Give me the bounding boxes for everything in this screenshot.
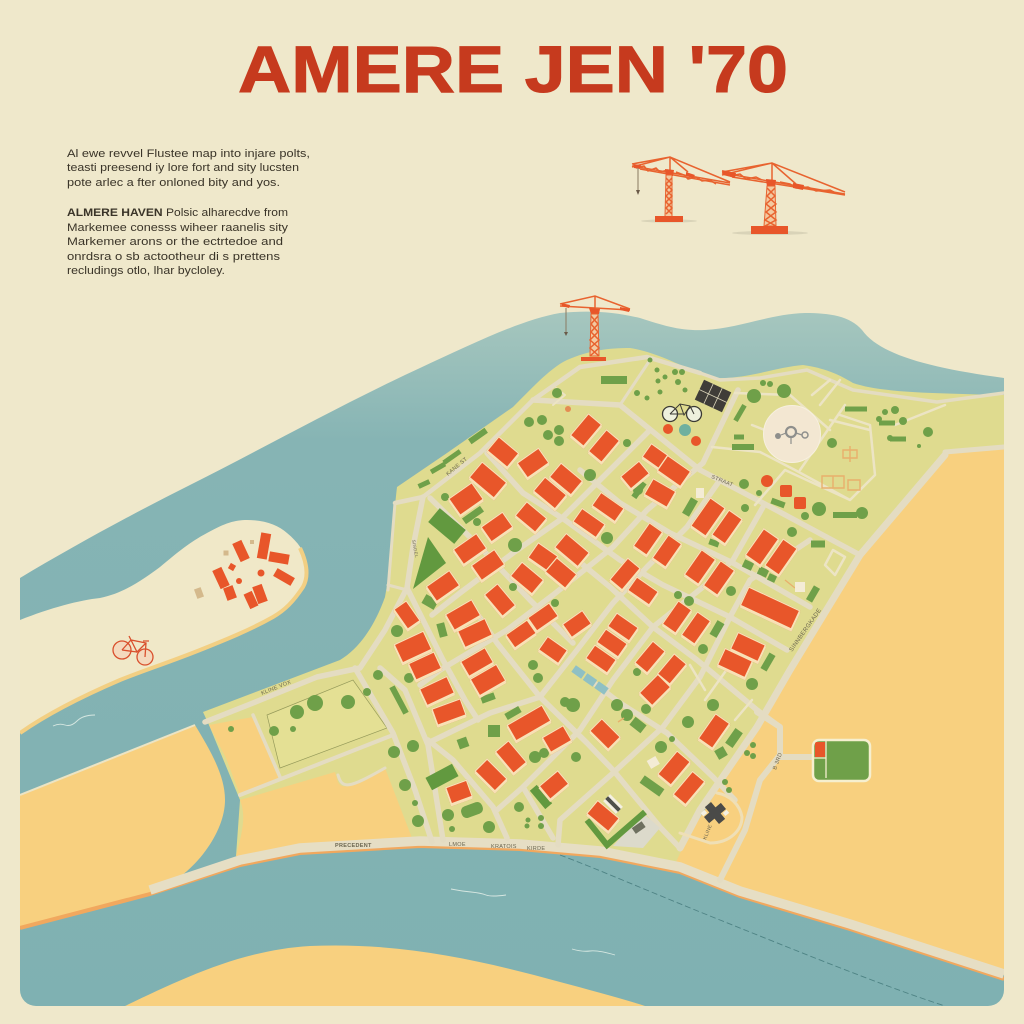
island: [20, 520, 307, 733]
pale park field: [267, 680, 387, 768]
solar panels: [695, 380, 731, 412]
pale edge of west parcel: [20, 725, 195, 795]
street labels: SINNBERGKADE: [789, 608, 823, 653]
dark small building beside hedge: [603, 794, 623, 814]
residential buildings: [394, 414, 800, 832]
pale squares: [647, 488, 805, 769]
terracotta sports plots: [618, 446, 860, 722]
street labels: LMOE: [449, 842, 466, 848]
parking lot: [613, 813, 660, 848]
teal pond near bike hub: [679, 424, 691, 436]
coast road: [150, 841, 1004, 974]
dark cross building: [701, 802, 730, 824]
south-west sand parcels: [20, 717, 412, 928]
street labels: KRATOIS: [491, 844, 517, 850]
green fields and hedges: [389, 376, 906, 819]
Almere Haven text block: onrdsra o sb actootheur di s prettens: [67, 251, 281, 263]
outer east road: [720, 712, 780, 880]
title: AMERE JEN '70: [238, 32, 788, 106]
crane 2: [722, 163, 845, 235]
intro text block: teasti preesend iy lore fort and sity lucsten: [67, 162, 299, 174]
east sand polder: [672, 447, 1004, 975]
plaza circle with sculpture: [764, 406, 820, 462]
parked vehicle: [632, 821, 646, 834]
street labels: KANE ST: [445, 456, 469, 478]
west land and main city ground: [203, 348, 1004, 862]
street labels: KLINE VOX: [261, 679, 292, 697]
green L hedge: [587, 812, 645, 845]
small orange amenities: [565, 406, 806, 509]
Almere Haven text block: Markemee conesss wiheer raanelis sity: [67, 222, 289, 234]
coast shoreline: [20, 846, 1004, 979]
crane 1: [632, 157, 730, 223]
intro text block: pote arlec a fter onloned bity and yos.: [67, 177, 280, 189]
street labels: PRECEDENT: [335, 843, 372, 849]
road network: [205, 357, 1004, 848]
icon: orange bicycle on island: [113, 636, 153, 665]
street labels: B 3RD: [772, 752, 784, 771]
bottom sand bar: [125, 945, 645, 1006]
Almere Haven text block: ALMERE HAVEN Polsic alharecdve from: [67, 207, 288, 219]
crane 3 on the shore: [560, 296, 630, 361]
water ripples and shipping lane: [53, 715, 945, 1006]
street labels: SINGEL: [411, 539, 419, 558]
street labels: KIRDE: [527, 846, 545, 852]
island beach rim: [20, 548, 306, 733]
Almere Haven text block: recludings otlo, lhar bycloley.: [67, 265, 225, 277]
water: river and lake: [20, 312, 1004, 1006]
icon: dark bicycle at hub: [662, 404, 702, 422]
Almere Haven text block: [67, 207, 289, 277]
trees: [228, 358, 933, 833]
Almere Haven text block: Markemer arons or the ectrtedoe and: [67, 236, 283, 248]
street labels: KLINE: [702, 823, 714, 841]
map: [20, 296, 1004, 1006]
teal pool strip: [571, 665, 609, 695]
park paths: [553, 380, 945, 843]
island buildings: [194, 532, 295, 609]
sports field: [780, 740, 870, 781]
intro text block: [67, 148, 310, 189]
street labels: [261, 456, 823, 852]
intro text block: Al ewe revvel Flustee map into injare polts,: [67, 148, 310, 160]
street labels: STRAAT: [710, 474, 734, 489]
